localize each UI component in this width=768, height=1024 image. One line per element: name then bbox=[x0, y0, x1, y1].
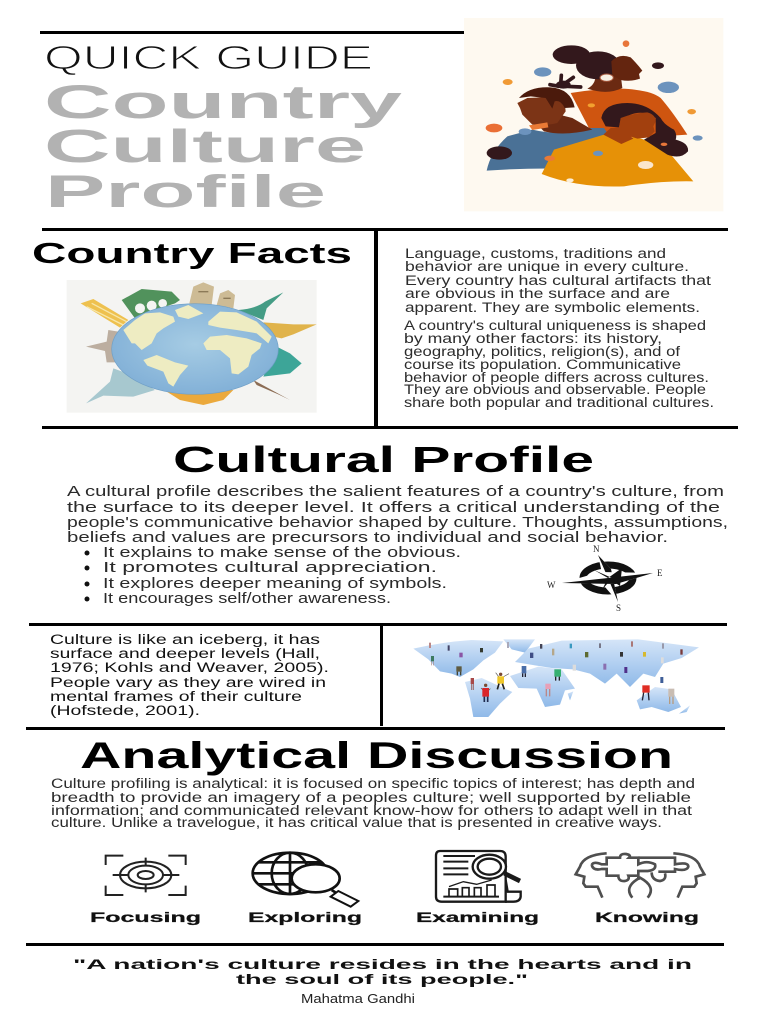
man in blue bbox=[487, 87, 611, 171]
icon: knowing heads with puzzle bbox=[576, 853, 704, 898]
title: country culture profile: Culture bbox=[44, 120, 366, 172]
text block: iceberg: People vary as they are wired in bbox=[50, 675, 326, 690]
text block: cultural profile description: the surface to its deeper level. It offers a critical understanding of the bbox=[67, 499, 720, 516]
icon: compass bbox=[547, 544, 663, 613]
text block: iceberg: 1976; Kohls and Weaver, 2005). bbox=[50, 660, 329, 675]
icon labels: Exploring bbox=[248, 910, 362, 925]
quote: the soul of its people." bbox=[236, 971, 528, 987]
image: world map with people bbox=[413, 639, 699, 717]
text block: country facts bbox=[404, 246, 714, 410]
bullet list: It encourages self/other awareness. bbox=[103, 590, 391, 607]
title: country culture profile: Profile bbox=[45, 166, 326, 217]
text block: cultural profile description: beliefs and values are precursors to individual and social behavior. bbox=[67, 529, 668, 546]
text block: country facts: behavior are unique in every culture. bbox=[405, 259, 689, 274]
text block: iceberg: mental frames of their culture bbox=[50, 689, 302, 704]
text block: iceberg: Culture is like an iceberg, it has bbox=[50, 632, 320, 647]
text block: country facts: apparent. They are symbolic elements. bbox=[405, 300, 700, 315]
text block: country facts: share both popular and traditional cultures. bbox=[404, 395, 714, 410]
heading: cultural profile: Cultural Profile bbox=[173, 439, 594, 480]
heading: analytical discussion: Analytical Discussion bbox=[80, 735, 673, 776]
text block: analytical discussion: Culture profiling is analytical: it is focused on specific topics of interest; has depth and bbox=[51, 776, 695, 791]
heading: country facts: Country Facts bbox=[32, 238, 352, 270]
text block: country facts: behavior of people differs across cultures. bbox=[404, 370, 709, 385]
quote: "A nation's culture resides in the hearts and in bbox=[73, 956, 692, 972]
bullet list: It promotes cultural appreciation. bbox=[103, 559, 437, 576]
quote attribution: Mahatma Gandhi bbox=[301, 991, 415, 1006]
globe bbox=[112, 304, 278, 394]
icon: compass: N bbox=[593, 544, 600, 554]
icon labels: Examining bbox=[416, 910, 539, 925]
title block bbox=[44, 39, 402, 217]
icon: compass: W bbox=[547, 580, 556, 590]
text block: country facts: They are obvious and observable. People bbox=[404, 382, 706, 397]
text block: cultural profile description: people's communicative behavior shaped by culture. Thoughts, assumptions, bbox=[67, 514, 728, 531]
icon: compass: E bbox=[657, 568, 663, 578]
image: globe with landmarks bbox=[67, 280, 317, 413]
kicker: quick guide: QUICK GUIDE bbox=[44, 39, 373, 76]
icon labels: Knowing bbox=[595, 910, 699, 925]
title: country culture profile: Country bbox=[44, 75, 402, 128]
text block: analytical discussion: breadth to provide an imagery of a peoples culture; well supported by reliable bbox=[51, 790, 691, 805]
text block: iceberg: (Hofstede, 2001). bbox=[50, 703, 200, 718]
icon labels bbox=[90, 910, 699, 925]
text block: country facts: A country's cultural uniqueness is shaped bbox=[404, 318, 706, 333]
text block: iceberg bbox=[50, 632, 329, 718]
icon labels: Focusing bbox=[90, 910, 201, 925]
bullet list bbox=[84, 544, 461, 607]
text block: country facts: course its population. Communicative bbox=[404, 357, 681, 372]
text block: country facts: Language, customs, traditions and bbox=[405, 246, 666, 261]
text block: country facts: Every country has cultural artifacts that bbox=[405, 273, 711, 288]
text block: analytical discussion bbox=[51, 776, 695, 830]
woman in yellow bbox=[542, 103, 693, 187]
text block: country facts: are obvious in the surface and are bbox=[405, 286, 670, 301]
text block: analytical discussion: information; and communicated relevant know-how for others to adapt well in that bbox=[51, 803, 692, 818]
text block: country facts: by many other factors: its history, bbox=[404, 331, 662, 346]
text block: country facts: geography, politics, religion(s), and of bbox=[404, 344, 680, 359]
title: country culture profile bbox=[44, 75, 402, 217]
woman in orange bbox=[550, 45, 687, 138]
text block: analytical discussion: culture. Unlike a travelogue, it has critical value that is presented in creative ways. bbox=[51, 815, 662, 830]
icon: focusing target bbox=[106, 856, 186, 895]
people figures bbox=[429, 641, 683, 704]
icon: compass: S bbox=[616, 603, 621, 613]
bullet list: It explains to make sense of the obvious. bbox=[103, 544, 461, 561]
text block: iceberg: surface and deeper levels (Hall, bbox=[50, 646, 320, 661]
bullet list: It explores deeper meaning of symbols. bbox=[103, 575, 447, 592]
quote bbox=[73, 956, 692, 1006]
illustration: three people bbox=[464, 18, 723, 211]
raised hand bbox=[550, 75, 581, 89]
text block: cultural profile description: A cultural profile describes the salient features of a country's culture, from bbox=[67, 483, 724, 500]
text block: cultural profile description bbox=[67, 483, 728, 546]
icon: examining report bbox=[436, 851, 521, 902]
icon: exploring globe and magnifier bbox=[253, 853, 358, 907]
